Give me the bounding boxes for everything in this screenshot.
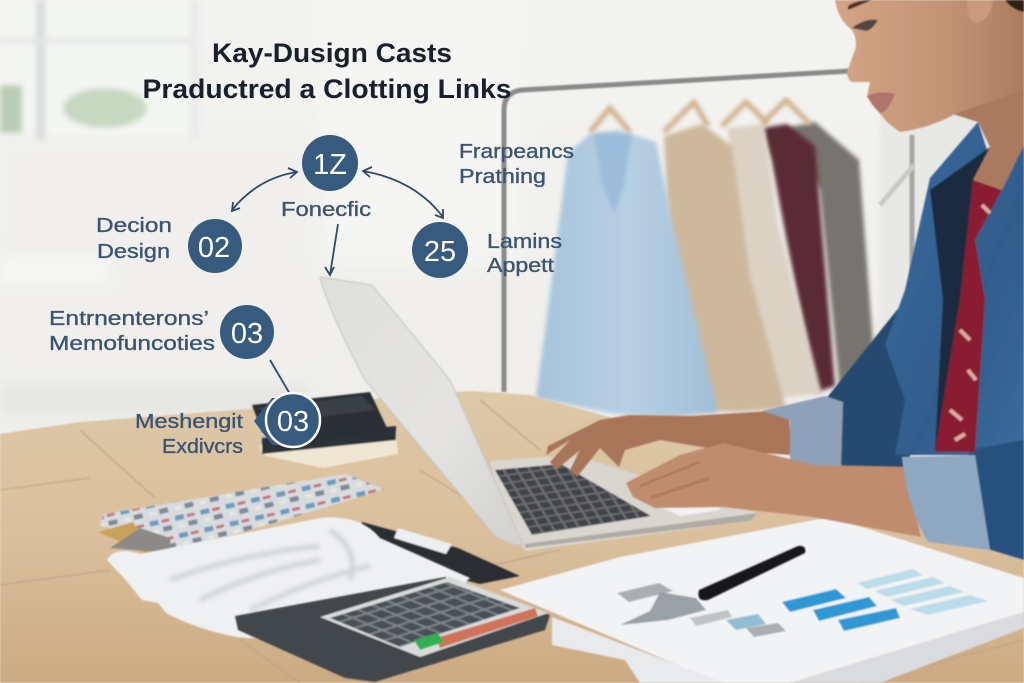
chart bars: blue bbox=[782, 589, 900, 631]
person: face bbox=[835, 0, 1024, 132]
label: Frarpeancs Prathing: Frarpeancs bbox=[459, 141, 574, 163]
node: 25 Lamins Appett bbox=[412, 222, 562, 278]
arrow: top node to right node bbox=[363, 167, 443, 218]
person: eyebrow bbox=[848, 0, 872, 10]
fabric swatch bundle bbox=[98, 474, 384, 562]
node: 02 Decion Design: Decion bbox=[96, 215, 172, 237]
node: 03 Entrnenterons Memofuncoties: Entrnenterons’ bbox=[49, 308, 209, 330]
person: front arm bbox=[626, 443, 921, 537]
garment: beige coat bbox=[664, 124, 786, 412]
person: mouth bbox=[867, 92, 895, 113]
node: 03 Meshengit Exdivcrs bbox=[135, 393, 320, 458]
garment: grey patterned coat bbox=[785, 122, 878, 390]
title: Praductred a Clotting Links bbox=[142, 74, 512, 104]
hangers bbox=[590, 100, 810, 132]
background: blurred window bbox=[0, 0, 199, 140]
node: 1Z Fonecfic: Fonecfic bbox=[281, 199, 371, 221]
hanging clothes bbox=[536, 100, 878, 418]
laptop base bbox=[490, 455, 758, 551]
person: jacket collar inner bbox=[930, 147, 990, 450]
arrow: node to lower node bbox=[270, 360, 290, 394]
white folded t-shirt bbox=[107, 517, 470, 638]
arrow: top node to laptop bbox=[325, 224, 338, 275]
node: 03 Entrnenterons Memofuncoties: 03 bbox=[231, 318, 263, 350]
garment: cream shirt bbox=[728, 124, 822, 398]
node: 1Z Fonecfic: 1Z bbox=[313, 149, 347, 181]
garment: light blue shirt bbox=[536, 130, 718, 418]
tablet and clip under shirt bbox=[360, 522, 520, 584]
garment collar bbox=[594, 134, 632, 214]
chart bars: grey bbox=[617, 583, 786, 637]
laptop lid bbox=[320, 277, 523, 545]
node: 03 Meshengit Exdivcrs: Exdivcrs bbox=[162, 436, 243, 458]
node: 03 Meshengit Exdivcrs: 03 bbox=[277, 406, 309, 438]
garment: maroon shirt bbox=[762, 124, 835, 392]
person bbox=[546, 0, 1024, 560]
background: blurred sofa bbox=[0, 255, 310, 415]
node: 03 Entrnenterons Memofuncoties bbox=[49, 305, 274, 359]
person: fingers bbox=[640, 462, 710, 498]
person: left sleeve bbox=[825, 300, 930, 470]
stack of notebooks bbox=[252, 392, 398, 468]
person: neck bbox=[940, 70, 1024, 190]
person: hair bbox=[1005, 0, 1024, 12]
title bbox=[142, 38, 512, 104]
node: 25 Lamins Appett: 25 bbox=[424, 236, 456, 268]
node: 25 Lamins Appett: Lamins bbox=[487, 231, 562, 253]
calculator bbox=[235, 577, 550, 682]
node: 1Z Fonecfic bbox=[281, 135, 371, 221]
laptop keyboard bbox=[495, 464, 651, 535]
node: 02 Decion Design bbox=[96, 215, 242, 273]
node: 25 Lamins Appett: Appett bbox=[487, 255, 555, 277]
clothing rack bbox=[504, 71, 914, 392]
node: 02 Decion Design: Design bbox=[97, 241, 170, 263]
label: Frarpeancs Prathing bbox=[459, 141, 574, 188]
person: rolled cuff right bbox=[902, 455, 990, 550]
wooden table bbox=[0, 391, 1024, 683]
person: ear bbox=[967, 0, 993, 23]
chart bars: pale blue bbox=[857, 569, 988, 615]
white sheet on trackpad bbox=[650, 496, 720, 516]
node: 03 Entrnenterons Memofuncoties: Memofuncoties bbox=[49, 333, 215, 355]
pen bbox=[698, 546, 805, 600]
person: red blouse bbox=[935, 180, 1002, 452]
node: 02 Decion Design: 02 bbox=[198, 232, 230, 264]
person: back arm and hand bbox=[546, 410, 791, 477]
label: Frarpeancs Prathing: Prathing bbox=[459, 166, 546, 188]
arrow: top node to left node bbox=[232, 168, 297, 211]
diagram arrows bbox=[232, 167, 443, 394]
node: 03 Meshengit Exdivcrs: Meshengit bbox=[135, 411, 244, 433]
title: Kay-Dusign Casts bbox=[212, 38, 452, 68]
papers with charts bbox=[500, 517, 1024, 683]
person: torso jacket bbox=[885, 122, 1024, 455]
person: rolled cuff left bbox=[762, 396, 843, 466]
person: eye bbox=[852, 20, 878, 31]
person: right lower jacket bbox=[968, 440, 1024, 560]
laptop bbox=[320, 277, 758, 551]
